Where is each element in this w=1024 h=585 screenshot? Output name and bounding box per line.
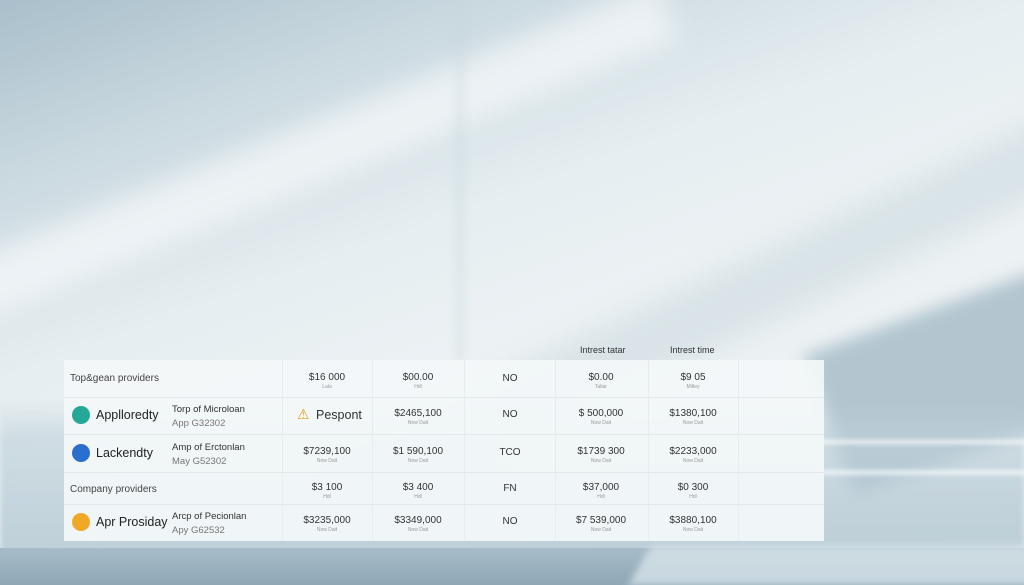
- table: loan providers: Now Dait: [317, 458, 337, 464]
- table: loan providers: $2465,100: [394, 408, 442, 419]
- table: loan providers: NO: [502, 373, 518, 384]
- table: loan providers: $3 100: [312, 482, 342, 493]
- table: loan providers: Now Dait: [683, 420, 703, 426]
- table: loan providers: ⚠: [297, 406, 310, 422]
- row 1: Top&gean providers: [70, 373, 159, 384]
- table: loan providers: $9 05: [680, 372, 706, 383]
- table: loan providers: Now Dait: [408, 420, 428, 426]
- table: loan providers: App G32302: [172, 418, 225, 429]
- table: loan providers: $1380,100: [669, 408, 717, 419]
- table: loan providers: FN: [503, 483, 517, 494]
- table: loan providers: Now Dait: [591, 458, 611, 464]
- table: loan providers: Hdl: [323, 494, 331, 500]
- table: loan providers: [64, 360, 824, 541]
- table: loan providers: Tatlar: [595, 384, 607, 390]
- row 4: Company providers: [70, 484, 157, 495]
- table: loan providers: Amp of Erctonlan: [172, 442, 245, 453]
- table: loan providers: Lackendty: [96, 446, 153, 460]
- table: loan providers: Now Dait: [408, 458, 428, 464]
- table: loan providers: Now Dait: [683, 527, 703, 533]
- table: loan providers: $37,000: [583, 482, 619, 493]
- table: loan providers: Hdl: [414, 384, 422, 390]
- table: loan providers: Arcp of Pecionlan: [172, 511, 246, 522]
- table: loan providers: $3349,000: [394, 515, 442, 526]
- table: loan providers: $1 590,100: [393, 446, 443, 457]
- table: loan providers: Now Dait: [408, 527, 428, 533]
- table: loan providers: Pespont: [316, 408, 362, 422]
- table: loan providers: $7 539,000: [576, 515, 626, 526]
- table: loan providers: Now Dait: [591, 420, 611, 426]
- table: loan providers: $2233,000: [669, 446, 717, 457]
- column headers: Intrest tatar: [580, 345, 626, 355]
- table: loan providers: $0.00: [588, 372, 614, 383]
- row 2: [72, 406, 90, 424]
- table: loan providers: Apy G62532: [172, 525, 225, 536]
- table: loan providers: Now Dait: [317, 527, 337, 533]
- table: loan providers: May G52302: [172, 456, 226, 467]
- row 3: [72, 444, 90, 462]
- table: loan providers: NO: [502, 516, 518, 527]
- row 5: [72, 513, 90, 531]
- table: loan providers: Apr Prosiday: [96, 515, 168, 529]
- column headers: Intrest time: [670, 345, 715, 355]
- table: loan providers: Torp of Microloan: [172, 404, 245, 415]
- table: loan providers: $3880,100: [669, 515, 717, 526]
- table: loan providers: $16 000: [309, 372, 345, 383]
- table: loan providers: $3235,000: [303, 515, 351, 526]
- table: loan providers: $ 500,000: [579, 408, 623, 419]
- table: loan providers: $7239,100: [303, 446, 351, 457]
- table: loan providers: NO: [502, 409, 518, 420]
- table: loan providers: Hdl: [689, 494, 697, 500]
- table: loan providers: Mitley: [686, 384, 700, 390]
- table: loan providers: Now Dait: [591, 527, 611, 533]
- table: loan providers: TCO: [499, 447, 521, 458]
- table: loan providers: $1739 300: [577, 446, 625, 457]
- table: loan providers: Hdl: [414, 494, 422, 500]
- table: loan providers: $00.00: [403, 372, 433, 383]
- table: loan providers: $3 400: [403, 482, 433, 493]
- table: loan providers: Now Dait: [683, 458, 703, 464]
- column headers: [580, 345, 715, 355]
- table: loan providers: $0 300: [678, 482, 708, 493]
- table: loan providers: Lala: [322, 384, 332, 390]
- table: loan providers: Hdl: [597, 494, 605, 500]
- table: loan providers: Applloredty: [96, 408, 159, 422]
